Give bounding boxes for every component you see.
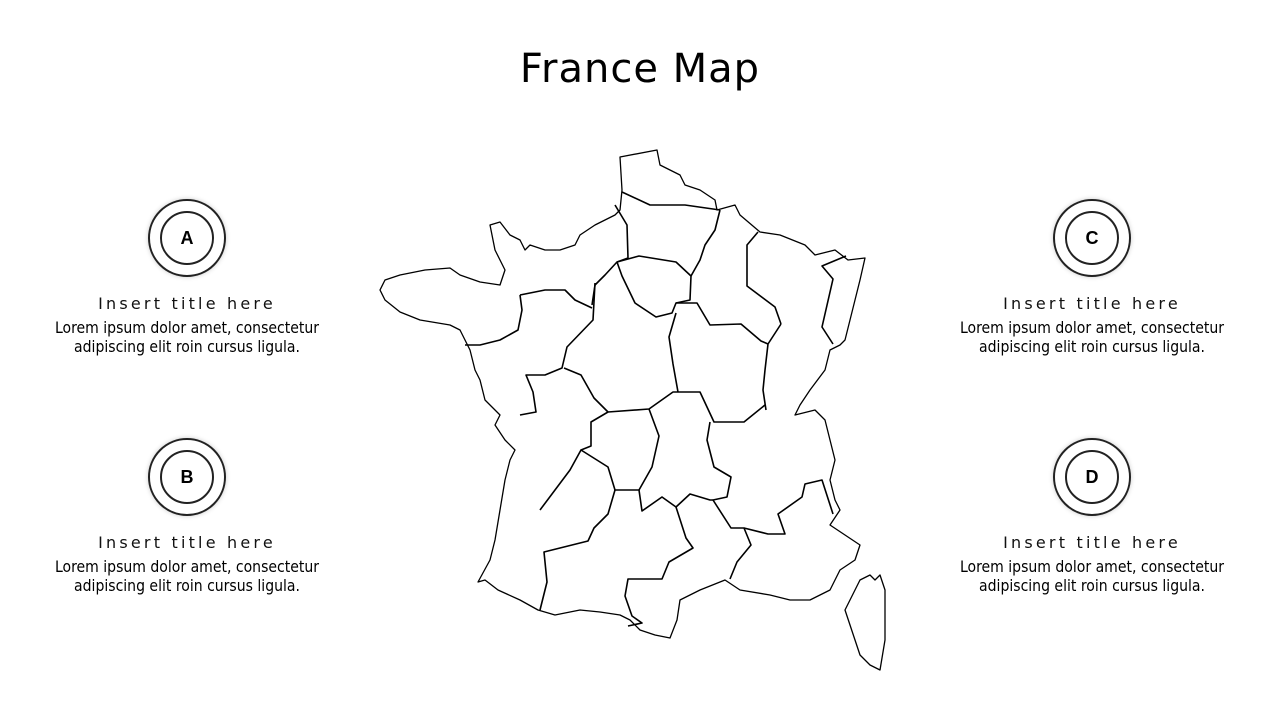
mainland outline <box>380 150 865 638</box>
icon: circle C <box>1051 197 1133 279</box>
text B <box>55 558 320 595</box>
text A <box>55 319 320 356</box>
card A <box>55 197 320 356</box>
text C <box>960 319 1224 356</box>
heading B: Insert title here <box>98 533 276 552</box>
icon: circle A <box>146 197 228 279</box>
icon: circle D: D <box>1086 467 1098 487</box>
card D <box>960 436 1224 595</box>
region borders <box>465 192 846 626</box>
text D <box>960 558 1224 595</box>
text B: Lorem ipsum dolor amet, consectetur <box>55 558 319 576</box>
icon: circle A: A <box>180 228 194 248</box>
icon: circle B <box>146 436 228 518</box>
text A: adipiscing elit roin cursus ligula. <box>74 338 300 356</box>
text A: Lorem ipsum dolor amet, consectetur <box>55 319 319 337</box>
text D: adipiscing elit roin cursus ligula. <box>979 577 1205 595</box>
card C <box>960 197 1224 356</box>
text C: Lorem ipsum dolor amet, consectetur <box>960 319 1224 337</box>
text C: adipiscing elit roin cursus ligula. <box>979 338 1205 356</box>
title: France Map <box>520 46 760 92</box>
icon: circle D <box>1051 436 1133 518</box>
text B: adipiscing elit roin cursus ligula. <box>74 577 300 595</box>
text D: Lorem ipsum dolor amet, consectetur <box>960 558 1224 576</box>
card B <box>55 436 320 595</box>
Corsica <box>845 575 885 670</box>
heading C: Insert title here <box>1003 294 1181 313</box>
icon: circle B: B <box>180 467 194 487</box>
icon: circle C: C <box>1086 228 1098 248</box>
heading A: Insert title here <box>98 294 276 313</box>
heading D: Insert title here <box>1003 533 1181 552</box>
